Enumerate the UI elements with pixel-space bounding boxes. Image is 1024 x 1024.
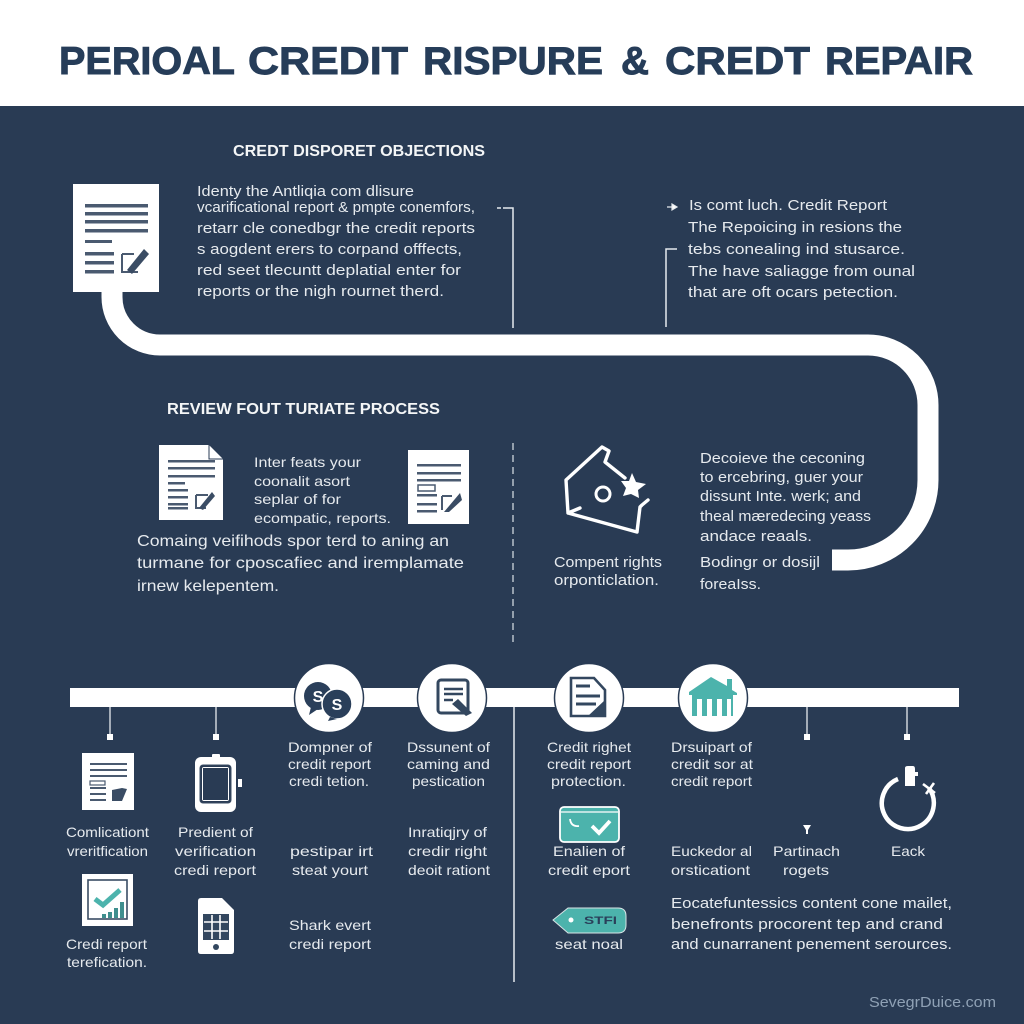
text block: rights description: to ercebring, guer your [700,470,863,486]
icon: house outline with star [566,447,648,532]
text: credit right: credit report [547,756,631,772]
title banner: & [621,40,649,83]
arrow: small pointer [667,204,677,210]
text: verification label: vreritfication [67,843,148,859]
icon: teal house circle [678,664,748,732]
text block: closing summary: Eocatefuntessics content cone mailet, [671,895,952,912]
text: pestipar: steat yourt [292,862,368,878]
icon: coins circle [294,664,364,732]
column: partinach [773,825,840,878]
text: dssunent: Dssunent of [407,739,490,755]
title banner: REPAIR [825,40,973,83]
title banner [0,0,1024,106]
column: device [174,754,256,954]
text block: report note: that are oft ocars petection. [688,284,898,301]
text: verification label [66,824,149,859]
panel: rights protection [554,447,871,593]
text block: closing summary: and cunarranent penement serources. [671,936,952,953]
text: shark [289,917,371,952]
title banner: RISPURE [423,40,603,83]
text block: long review copy: turmane for cposcafiec and iremplamate [137,555,464,572]
text: drsuipart: credit report [671,773,752,789]
icon: document with pen [73,184,159,292]
text block: closing summary: benefronts procorent tep and crand [671,916,943,933]
text block: closing summary [671,895,952,953]
text block: objections description: s aogdent erers to corpand offfects, [197,241,462,258]
text block: rights description: theal mæredecing yeass [700,509,871,525]
text: euckedor [671,843,752,878]
icon: phone document [198,898,234,954]
text: seat noal: seat noal [555,936,623,952]
text block: rights description: Decoieve the ceconing [700,451,865,467]
text block: objections description: red seet tlecuntt deplatial enter for [197,262,461,279]
column: document caming [407,739,490,878]
icon: check chart [82,874,133,926]
timeline bar [70,688,959,982]
icon: document with pen small [408,450,469,524]
text: verification report label [174,824,256,878]
text block: long review copy: Comaing veifihods spor terd to aning an [137,533,449,550]
icon: folded document [159,445,223,520]
text block: objections description: reports or the nigh rournet therd. [197,283,444,300]
column: credit ration [288,739,373,952]
text: inratiqjry [408,824,490,878]
text: partinach: Partinach [773,843,840,859]
heading: review process: REVIEW FOUT TURIATE PROCESS [167,401,440,418]
text: dompner: credi tetion. [289,773,369,789]
panel: credit report note [666,197,915,327]
text: inratiqjry: deoit rationt [408,862,490,878]
text block: long review copy [137,533,464,595]
arrow: right bracket [666,249,677,327]
text: partinach [773,843,840,878]
column: eack [882,766,935,859]
text: credit right: protection. [551,773,626,789]
text: dssunent [407,739,490,789]
text: inratiqjry: credir right [408,843,487,859]
text: enalien: Enalien of [553,843,625,859]
column: verification [66,753,149,970]
text block: rights caption: Compent rights [554,555,662,571]
text block: objections description: vcarificational report & pmpte conemfors, [197,199,475,216]
text block: rights description: foreaIss. [700,577,761,593]
text: drsuipart: Drsuipart of [671,739,752,755]
text block: short review copy [254,454,391,526]
text: euckedor: Euckedor al [671,843,752,859]
text block: rights description: Bodingr or dosijl [700,555,820,571]
text: verification report label: verification [175,843,256,859]
text: credit report label [66,936,147,970]
text block: rights caption [554,555,662,589]
icon: document [82,753,134,810]
text: inratiqjry: Inratiqjry of [408,824,487,840]
text block: rights description [700,451,871,593]
column: support [671,739,753,878]
text block: rights caption: orponticlation. [554,573,659,589]
title banner: CREDT [665,40,810,83]
text block: report note: The have saliagge from ounal [688,263,915,280]
section divider dashed [512,443,514,645]
text: pestipar [290,843,373,878]
icon: teal tag [553,908,626,933]
text: shark: Shark evert [289,917,371,933]
icon: document circle [554,664,624,732]
arrow: left bracket [497,208,513,328]
text block: long review copy: irnew kelepentem. [137,578,279,595]
icon: teal window with check [560,807,619,842]
text block: short review copy: Inter feats your [254,454,361,470]
text: verification label: Comlicationt [66,824,149,840]
icon: ring timer [882,766,935,829]
icon: coins circle: S [332,697,343,714]
text: drsuipart: credit sor at [671,756,753,772]
text block: short review copy: ecompatic, reports. [254,510,391,526]
text: dssunent: pestication [412,773,485,789]
text block: rights description: andace reaals. [700,529,812,545]
text: dssunent: caming and [407,756,490,772]
text block: report note: The Repoicing in resions the [688,219,902,236]
text: credit right [547,739,631,789]
text: partinach: rogets [783,862,829,878]
text: credit right: Credit righet [547,739,631,755]
icon: form with hand circle [418,664,486,732]
icon: small marker [803,825,811,834]
text: euckedor: orsticationt [671,862,750,878]
text block: objections description [197,183,475,300]
text: shark: credi report [289,936,371,952]
panel: credit dispute objections [73,143,513,328]
panel: review process [137,401,469,595]
text: verification report label: credi report [174,862,256,878]
text block: objections description: Identy the Antliqia com dlisure [197,183,414,200]
text block: short review copy: seplar of for [254,491,341,507]
text block: report note [688,197,915,301]
text block: rights description: dissunt Inte. werk; and [700,489,861,505]
text: dompner: credit report [288,756,371,772]
text block: report note: tebs conealing ind stusarce. [688,241,905,258]
text: drsuipart [671,739,753,789]
text: enalien [548,843,630,878]
text: dompner [288,739,372,789]
title banner: PERIOAL [59,40,235,83]
winding connector path [112,292,928,560]
text: verification report label: Predient of [178,824,253,840]
text: eack: Eack [891,843,926,859]
text block: report note: Is comt luch. Credit Report [689,197,888,214]
text: enalien: credit eport [548,862,630,878]
heading: objections: CREDT DISPORET OBJECTIONS [233,143,485,160]
text: credit report label: Credi report [66,936,147,952]
text block: objections description: retarr cle conedbgr the credit reports [197,220,475,237]
text: pestipar: pestipar irt [290,843,373,859]
title banner: CREDIT [248,40,408,83]
text block: short review copy: coonalit asort [254,473,350,489]
text: credit report label: terefication. [67,954,147,970]
footer source label: SevegrDuice.com [869,994,996,1011]
icon: coins circle: S [313,689,324,706]
icon: tablet [195,754,242,812]
column: credit right [547,739,631,952]
icon: teal tag: STFI [584,915,617,927]
text: dompner: Dompner of [288,739,372,755]
